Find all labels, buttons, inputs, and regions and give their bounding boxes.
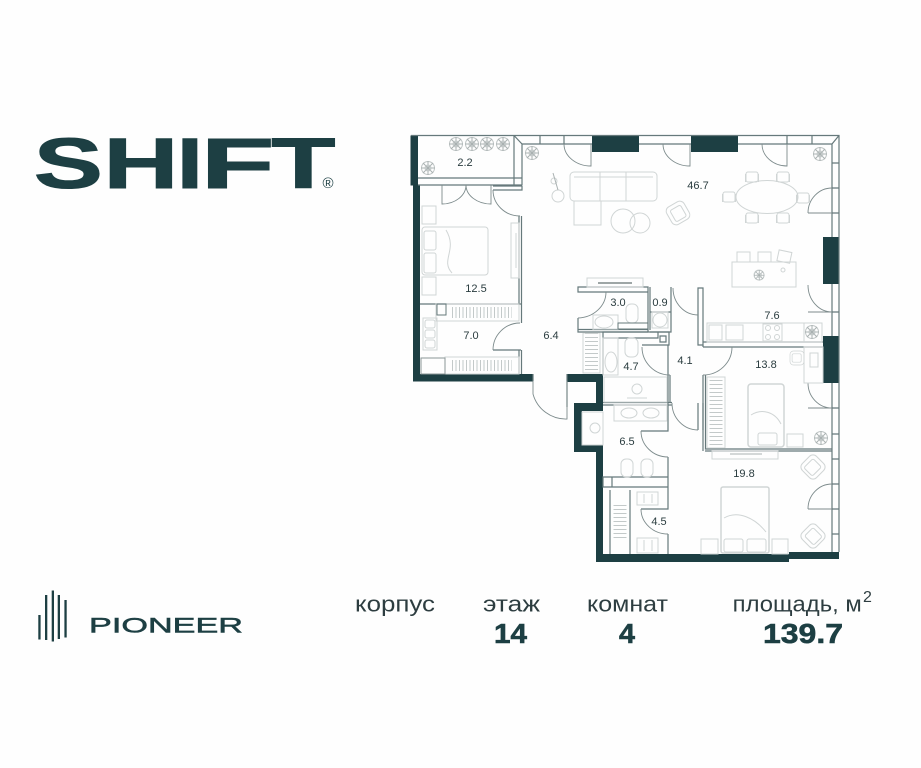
- outer walls: [410, 136, 839, 562]
- logo: SHIFT: T: [271, 125, 335, 204]
- stat: площадь: площадь, м: [733, 592, 862, 617]
- room areas: 13.8: [755, 359, 777, 371]
- room areas: 12.5: [465, 283, 487, 295]
- room areas: 7.0: [463, 330, 479, 342]
- stat: площадь: 2: [863, 589, 872, 606]
- logo: SHIFT: I: [177, 123, 203, 203]
- stat: комнат: 4: [619, 618, 635, 649]
- logo: PIONEER: [38, 590, 243, 642]
- stat: комнат: комнат: [587, 592, 668, 617]
- logo: SHIFT: [34, 123, 335, 204]
- room areas: 4.5: [651, 516, 667, 528]
- stat: площадь: 139.7: [763, 618, 843, 649]
- stat: этаж: [483, 592, 540, 649]
- room areas: 6.5: [619, 436, 635, 448]
- stat: комнат: [587, 592, 668, 649]
- furniture: living room: [551, 172, 822, 342]
- stat: площадь: [733, 589, 872, 649]
- window lines and partitions: [411, 136, 839, 554]
- logo: SHIFT: S: [34, 124, 103, 203]
- furniture: bathrooms: [582, 278, 668, 553]
- floor plan: [410, 136, 839, 562]
- room areas: 7.6: [764, 310, 780, 322]
- room areas: [457, 157, 780, 528]
- room areas: 2.2: [457, 157, 473, 169]
- plants: [421, 137, 828, 445]
- stat: этаж: этаж: [483, 592, 540, 617]
- stat: корпус: корпус: [355, 592, 435, 617]
- room areas: 3.0: [610, 297, 626, 309]
- room areas: 6.4: [543, 330, 559, 342]
- logo: SHIFT: ®: [322, 175, 334, 192]
- logo: SHIFT: H: [104, 124, 178, 203]
- room areas: 46.7: [687, 180, 709, 192]
- stat: этаж: 14: [494, 618, 527, 649]
- logo: SHIFT: F: [201, 123, 274, 203]
- room areas: 4.1: [677, 355, 693, 367]
- door arcs: [442, 144, 832, 534]
- room areas: 0.9: [652, 297, 668, 309]
- furniture: bedroom 12.5: [421, 206, 519, 374]
- furniture: bedrooms 13.8 and 19.8: [701, 347, 827, 554]
- logo: PIONEER: PIONEER: [89, 615, 243, 638]
- room areas: 19.8: [733, 468, 755, 480]
- room areas: 4.7: [623, 361, 639, 373]
